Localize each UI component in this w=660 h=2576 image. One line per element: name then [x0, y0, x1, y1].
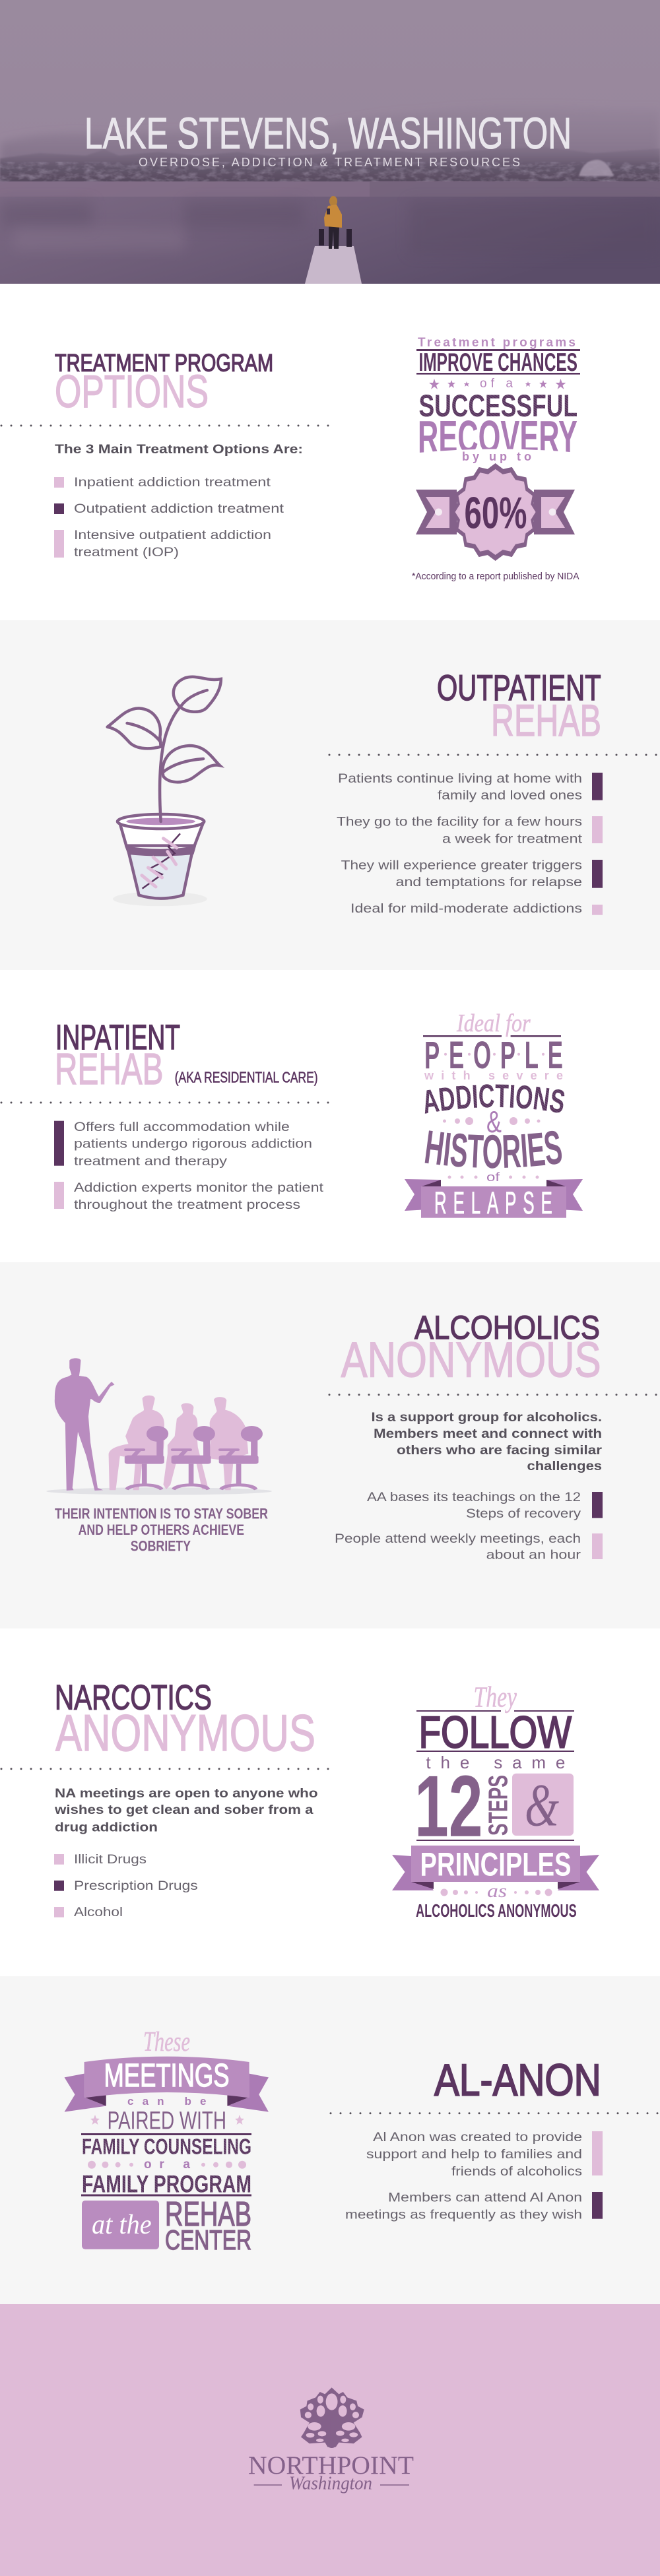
list: outpatient facts: They go to the facility for a few hours — [337, 815, 582, 829]
icon: person in orange jacket — [324, 196, 342, 249]
typographic poster: these meetings: FAMILY COUNSELING — [82, 2135, 251, 2160]
list: outpatient facts: family and loved ones — [438, 789, 582, 803]
text: description of AA: Members meet and connect with — [374, 1427, 602, 1441]
panel: footer — [0, 2304, 660, 2576]
typographic poster: follow the same 12 steps: They — [474, 1681, 517, 1714]
typographic poster: follow the same 12 steps: as — [487, 1881, 507, 1902]
list: AA facts: People attend weekly meetings, each — [335, 1531, 581, 1546]
list: outpatient facts: Patients continue living at home with — [338, 771, 582, 786]
heading: treatment program options: OPTIONS — [55, 366, 209, 417]
icon: northpoint peacock logo — [300, 2387, 364, 2448]
logo wordmark: NORTHPOINT — [248, 2451, 414, 2480]
typographic poster: ideal for people: of — [486, 1171, 500, 1184]
typographic poster: improve chances 60%: SUCCESSFUL — [418, 388, 578, 423]
typographic poster: these meetings: REHAB — [165, 2195, 251, 2234]
logo wordmark: Washington — [289, 2473, 372, 2494]
panel: alcoholics anonymous — [0, 1262, 660, 1628]
typographic poster: follow the same 12 steps: FOLLOW — [419, 1708, 572, 1758]
typographic poster: these meetings: at the — [92, 2210, 152, 2240]
typographic poster: follow the same 12 steps: 12 — [414, 1758, 483, 1855]
icon: snowy house on shore — [579, 160, 614, 176]
heading: narcotics anonymous — [55, 1679, 315, 1762]
heading: alcoholics anonymous: ALCOHOLICS — [414, 1309, 600, 1346]
typographic poster: improve chances 60%: Treatment programs — [418, 336, 576, 350]
text: description of NA: wishes to get clean and sober from a — [54, 1803, 314, 1817]
typographic poster: ideal for people — [405, 1010, 583, 1221]
text: description of AA: others who are facing similar — [397, 1443, 602, 1458]
ribbon: principles: PRINCIPLES — [420, 1846, 572, 1883]
caption: stay sober: SOBRIETY — [131, 1538, 191, 1555]
badge: 60% seal with ribbon — [416, 463, 575, 561]
list: al-anon facts: meetings as frequently as they wish — [345, 2208, 582, 2222]
list: outpatient facts — [337, 771, 603, 916]
list: substances: Alcohol — [74, 1905, 123, 1919]
panel: inpatient rehab — [0, 1010, 583, 1221]
list: al-anon facts — [345, 2130, 603, 2222]
panel: narcotics anonymous — [0, 1628, 660, 1976]
heading: outpatient rehab — [437, 668, 601, 746]
icon: stars row — [429, 379, 566, 389]
heading: outpatient rehab: REHAB — [491, 695, 601, 746]
heading: narcotics anonymous: ANONYMOUS — [55, 1704, 315, 1762]
heading: inpatient rehab: (AKA RESIDENTIAL CARE) — [175, 1069, 318, 1086]
icon: dock posts — [319, 229, 352, 247]
heading: alcoholics anonymous: ANONYMOUS — [341, 1332, 601, 1388]
text: description of NA — [54, 1786, 318, 1835]
list: outpatient facts: They will experience greater triggers — [341, 858, 582, 873]
typographic poster: these meetings: CENTER — [165, 2224, 251, 2255]
list: inpatient facts: treatment and therapy — [74, 1154, 227, 1169]
text: description of NA: NA meetings are open to anyone who — [55, 1786, 318, 1801]
list: substances: Prescription Drugs — [74, 1879, 198, 1893]
list: inpatient facts: Offers full accommodation while — [74, 1120, 290, 1134]
typographic poster: improve chances 60%: of a — [480, 377, 513, 391]
caption: stay sober: THEIR INTENTION IS TO STAY SOBER — [55, 1506, 268, 1522]
illustration: plant growing from mended pot — [108, 677, 221, 906]
typographic poster: follow the same 12 steps: the same — [426, 1753, 565, 1772]
typographic poster: follow the same 12 steps: & — [525, 1772, 559, 1839]
badge: 60% seal with ribbon: 60% — [465, 488, 527, 538]
list: AA facts: Steps of recovery — [466, 1506, 581, 1521]
list: three treatment options: Inpatient addiction treatment — [74, 475, 271, 490]
heading: inpatient rehab: REHAB — [55, 1045, 164, 1094]
typographic poster: these meetings: PAIRED WITH — [108, 2108, 226, 2135]
list: outpatient facts: and temptations for relapse — [396, 875, 582, 889]
ribbon: principles — [392, 1846, 599, 1890]
typographic poster: improve chances 60%: by up to — [462, 450, 531, 463]
typographic poster: these meetings: These — [143, 2027, 190, 2057]
heading: al-anon: AL-ANON — [434, 2055, 601, 2106]
list: three treatment options: Outpatient addiction treatment — [74, 501, 284, 516]
list: inpatient facts — [54, 1120, 324, 1212]
typographic poster: these meetings: can be — [127, 2095, 206, 2108]
list: three treatment options — [54, 475, 284, 560]
panel: treatment program options — [0, 338, 580, 581]
panel: al-anon — [0, 1976, 660, 2304]
text: description of NA: drug addiction — [55, 1820, 158, 1835]
text: description of AA — [371, 1410, 602, 1473]
list: AA facts: about an hour — [486, 1548, 581, 1562]
caption: stay sober — [55, 1506, 268, 1555]
typographic poster: these meetings — [65, 2027, 269, 2255]
list: inpatient facts: throughout the treatment process — [74, 1198, 300, 1212]
list: AA facts — [335, 1490, 603, 1562]
icon: snow covered dock — [305, 246, 362, 284]
footnote: *According to a report published by NIDA — [412, 571, 579, 582]
typographic poster: these meetings: or a — [144, 2158, 190, 2172]
heading: inpatient rehab — [55, 1018, 318, 1094]
list: substances — [54, 1852, 198, 1919]
illustration: speaker and seated group — [46, 1358, 272, 1495]
heading: alcoholics anonymous — [341, 1309, 601, 1388]
text: list intro: The 3 Main Treatment Options Are: — [55, 442, 303, 457]
typographic poster: follow the same 12 steps: STEPS — [483, 1775, 513, 1836]
ribbon: relapse: RELAPSE — [434, 1186, 552, 1221]
list: three treatment options: Intensive outpatient addiction — [74, 528, 271, 542]
typographic poster: improve chances 60% — [412, 336, 580, 582]
list: al-anon facts: support and help to families and — [366, 2147, 582, 2162]
text: description of AA: Is a support group for alcoholics. — [371, 1410, 602, 1425]
typographic poster: ideal for people: PEOPLE — [424, 1035, 563, 1077]
typographic poster: follow the same 12 steps: ALCOHOLICS ANONYMOUS — [416, 1900, 577, 1921]
list: three treatment options: treatment (IOP) — [74, 545, 179, 560]
heading: narcotics anonymous: NARCOTICS — [55, 1679, 212, 1718]
list: al-anon facts: Al Anon was created to provide — [373, 2130, 582, 2144]
typographic poster: ideal for people: HISTORIES — [425, 1130, 562, 1169]
typographic poster: ideal for people: ADDICTIONS — [425, 1084, 565, 1114]
typographic poster: ideal for people: with severe — [424, 1069, 563, 1082]
heading: treatment program options: TREATMENT PROGRAM — [55, 350, 273, 377]
ribbon: relapse — [405, 1179, 583, 1221]
panel: outpatient rehab — [0, 620, 660, 970]
typographic poster: ideal for people: Ideal for — [456, 1010, 531, 1037]
heading: outpatient rehab: OUTPATIENT — [437, 668, 601, 708]
typographic poster: these meetings: MEETINGS — [104, 2058, 230, 2094]
list: substances: Illicit Drugs — [74, 1852, 147, 1867]
list: inpatient facts: patients undergo rigorous addiction — [74, 1136, 312, 1151]
caption: stay sober: AND HELP OTHERS ACHIEVE — [79, 1522, 244, 1538]
typographic poster: follow the same 12 steps — [392, 1681, 599, 1921]
list: outpatient facts: a week for treatment — [442, 832, 583, 847]
text: description of AA: challenges — [527, 1459, 602, 1473]
subtitle: OVERDOSE, ADDICTION & TREATMENT RESOURCES — [139, 156, 520, 169]
list: inpatient facts: Addiction experts monitor the patient — [74, 1180, 324, 1195]
list: al-anon facts: Members can attend Al Anon — [388, 2191, 582, 2205]
heading: inpatient rehab: INPATIENT — [55, 1018, 180, 1057]
list: AA facts: AA bases its teachings on the 12 — [367, 1490, 581, 1504]
typographic poster: ideal for people: & — [486, 1105, 502, 1139]
ribbon: meetings — [65, 2057, 269, 2112]
typographic poster: these meetings: FAMILY PROGRAM — [82, 2171, 251, 2198]
panel: hero photo header — [0, 0, 660, 284]
list: al-anon facts: friends of alcoholics — [451, 2164, 582, 2179]
logo wordmark — [248, 2451, 414, 2494]
list: outpatient facts: Ideal for mild-moderate addictions — [350, 901, 582, 916]
